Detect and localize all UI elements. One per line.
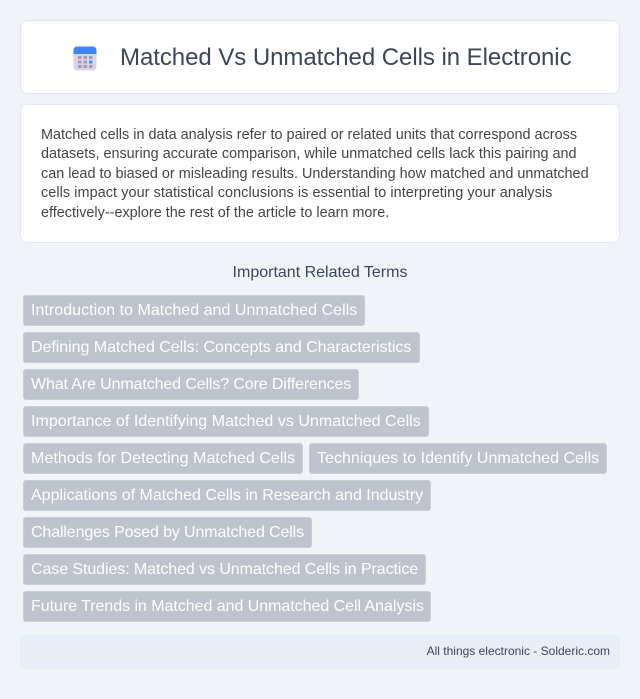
- footer credit: All things electronic - Solderic.com: [427, 644, 610, 658]
- tag: Methods for Detecting Matched Cells: [31, 450, 295, 467]
- intro text: [41, 126, 589, 220]
- tag: [309, 443, 607, 474]
- icon: calendar grid: [74, 46, 96, 70]
- tag: Challenges Posed by Unmatched Cells: [31, 524, 304, 541]
- tag: [23, 517, 312, 548]
- tag: [23, 480, 431, 511]
- intro text: effectively--explore the rest of the article to learn more.: [41, 204, 389, 220]
- tag: [23, 369, 359, 400]
- tag: [23, 443, 303, 474]
- header card: [20, 20, 620, 94]
- tag: Techniques to Identify Unmatched Cells: [317, 450, 599, 467]
- tag: Defining Matched Cells: Concepts and Characteristics: [31, 339, 411, 356]
- intro text: datasets, ensuring accurate comparison, while unmatched cells lack this pairing and: [41, 146, 577, 162]
- tag: Introduction to Matched and Unmatched Cells: [31, 302, 357, 319]
- heading: related terms: Important Related Terms: [233, 264, 407, 281]
- tag: [23, 332, 420, 363]
- tag: Future Trends in Matched and Unmatched Cell Analysis: [31, 598, 424, 615]
- title: Matched Vs Unmatched Cells in Electronic: [120, 44, 572, 71]
- tag: [23, 406, 429, 437]
- tag: What Are Unmatched Cells? Core Differences: [31, 376, 351, 393]
- panel: intro paragraph: [20, 104, 620, 243]
- intro text: Matched cells in data analysis refer to paired or related units that correspond across: [41, 126, 577, 142]
- intro text: cells impact your statistical conclusions is essential to interpreting your analysis: [41, 185, 552, 201]
- tag: [23, 295, 365, 326]
- intro text: can lead to biased or misleading results. Understanding how matched and unmatched: [41, 166, 589, 182]
- tag list: [23, 295, 607, 622]
- tag: Importance of Identifying Matched vs Unmatched Cells: [31, 413, 421, 430]
- tag: Applications of Matched Cells in Research and Industry: [31, 487, 423, 504]
- tag: [23, 554, 426, 585]
- tag: Case Studies: Matched vs Unmatched Cells in Practice: [31, 561, 418, 578]
- tag: [23, 591, 431, 622]
- footer: [20, 635, 620, 669]
